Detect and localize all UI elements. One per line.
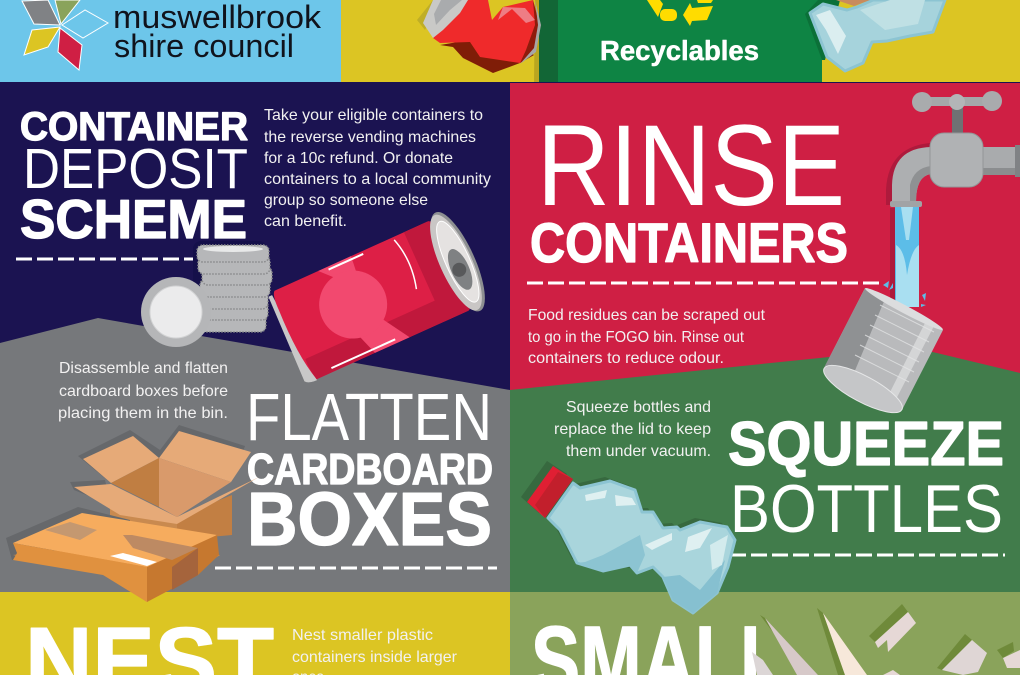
icon: tin can [818,285,945,421]
icon: red drink can [263,205,496,389]
icon: council logo star [22,0,108,70]
panel: small [510,592,1020,675]
heading: container deposit scheme: SCHEME [20,188,247,250]
text: rinse body [528,307,766,367]
heading: squeeze bottles: SQUEEZE [728,410,1004,479]
panel: container deposit scheme [0,83,510,403]
heading: flatten cardboard boxes: FLATTEN [246,380,492,455]
icon: recycling arrows [647,0,713,26]
heading: rinse containers: RINSE [537,102,845,230]
icon: flattened cardboard boxes [6,507,220,602]
heading: rinse containers: CONTAINERS [530,211,848,274]
text: flatten body: placing them in the bin. [58,405,228,422]
text: squeeze body [554,399,711,460]
icon: single coin [141,277,211,347]
panel: nest [0,592,510,675]
text: rinse body: containers to reduce odour. [528,350,724,367]
heading: container deposit scheme: DEPOSIT [23,137,248,201]
logo wordmark: shire council [114,28,294,64]
heading: flatten cardboard boxes [246,380,493,561]
panel: yellow header [341,0,1020,82]
text: deposit scheme body [264,107,491,230]
text: squeeze body: Squeeze bottles and [566,399,711,416]
text: flatten body: cardboard boxes before [59,383,228,400]
text: deposit scheme body: containers to a local community [264,171,491,188]
text: rinse body: Food residues can be scraped out [528,307,766,324]
text: nest body [292,627,458,675]
heading: squeeze bottles [728,410,1004,547]
panel: rinse containers [510,83,1020,403]
panel: squeeze bottles [510,348,1020,592]
text: nest body: containers inside larger [292,649,458,666]
heading: flatten cardboard boxes: BOXES [247,477,492,561]
heading: rinse containers [530,102,848,274]
icon: paper pieces [752,604,1020,675]
text: flatten body [58,360,228,422]
text: deposit scheme body: Take your eligible containers to [264,107,483,124]
icon: scissor blades [760,608,867,675]
logo wordmark: muswellbrook [113,0,322,35]
icon: recycling bin [534,0,822,82]
heading: flatten cardboard boxes: CARDBOARD [247,445,493,494]
icon: running water [883,207,926,307]
icon: open cardboard box [70,425,259,540]
text: deposit scheme body: group so someone else [264,192,428,209]
heading: container deposit scheme [20,105,248,250]
icon: coin stack [193,241,272,333]
icon: crushed bottle in header [805,0,945,71]
icon: crushed red can [417,0,541,73]
text: flatten body: Disassemble and flatten [59,360,228,377]
panel: flatten cardboard boxes [0,318,510,592]
text: deposit scheme body: can benefit. [264,213,347,230]
text: deposit scheme body: for a 10c refund. Or donate [264,150,453,167]
text: squeeze body: replace the lid to keep [554,421,711,438]
icon: water tap [886,91,1020,300]
logo wordmark [113,0,322,64]
text: squeeze body: them under vacuum. [566,443,711,460]
heading: container deposit scheme: CONTAINER [20,105,248,149]
text: deposit scheme body: the reverse vending machines [264,129,476,146]
icon: squeezed plastic bottle [521,461,735,613]
label: recyclables: Recyclables [600,35,759,66]
text: rinse body: to go in the FOGO bin. Rinse out [528,329,745,346]
panel: logo header [0,0,341,82]
text: nest body: Nest smaller plastic [292,627,433,644]
